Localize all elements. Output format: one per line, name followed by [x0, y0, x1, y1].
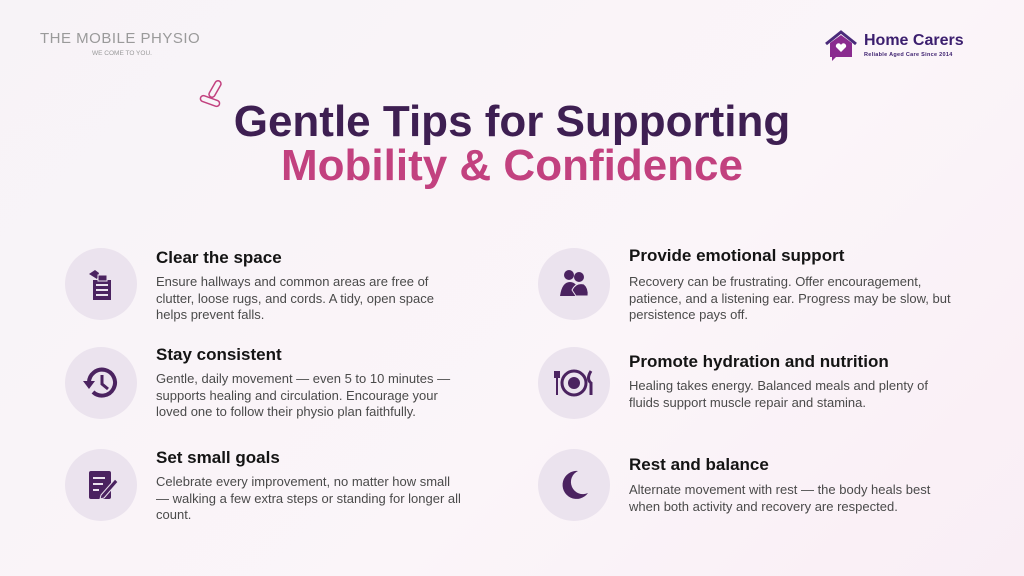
- panel: stay consistent: Stay consistent: [156, 345, 282, 364]
- panel: rest and balance: [538, 449, 930, 521]
- icon: clock history: [65, 347, 137, 419]
- panel: emotional support: [538, 246, 951, 322]
- title: Mobility & Confidence: [281, 141, 743, 190]
- icon: plate: [538, 347, 610, 419]
- panel: clear the space: [65, 248, 434, 322]
- icon: notepad: [65, 449, 137, 521]
- panel: clear the space: Ensure hallways and common areas are free of clutter, loose rugs, and cords. A tidy, open space helps prevent falls.: [156, 274, 434, 322]
- icon: hug: [538, 248, 610, 320]
- panel: set small goals: [65, 448, 461, 522]
- icon: moon: [538, 449, 610, 521]
- title: Gentle Tips for Supporting: [234, 97, 790, 146]
- title: [234, 97, 790, 190]
- panel: hydration and nutrition: Promote hydration and nutrition: [629, 352, 889, 371]
- panel: stay consistent: [65, 345, 450, 419]
- panel: hydration and nutrition: [538, 347, 928, 419]
- logo: home carers: Home Carers: [864, 32, 964, 49]
- icon: sparkle accent: [200, 80, 222, 108]
- logo: the mobile physio: WE COME TO YOU.: [92, 50, 152, 57]
- panel: set small goals: Set small goals: [156, 448, 280, 467]
- panel: set small goals: Celebrate every improvement, no matter how small — walking a few extra steps or standing for longer all count.: [156, 474, 461, 522]
- logo: home carers: Reliable Aged Care Since 2014: [864, 52, 953, 58]
- panel: rest and balance: Alternate movement with rest — the body heals best when both activity and recovery are respected.: [629, 482, 930, 514]
- logo: home carers: [825, 30, 964, 61]
- panel: emotional support: Provide emotional support: [629, 246, 844, 265]
- icon: box: [65, 248, 137, 320]
- panel: hydration and nutrition: Healing takes energy. Balanced meals and plenty of fluids support muscle repair and stamina.: [629, 378, 928, 410]
- panel: clear the space: Clear the space: [156, 248, 282, 267]
- panel: stay consistent: Gentle, daily movement — even 5 to 10 minutes — supports healing and circulation. Encourage your loved one to follow their physio plan faithfully.: [156, 371, 450, 419]
- logo: the mobile physio: [40, 30, 200, 57]
- panel: rest and balance: Rest and balance: [629, 455, 769, 474]
- logo: the mobile physio: THE MOBILE PHYSIO: [40, 30, 200, 47]
- panel: emotional support: Recovery can be frustrating. Offer encouragement, patience, and a listening ear. Progress may be slow, but persistence pays off.: [629, 274, 951, 322]
